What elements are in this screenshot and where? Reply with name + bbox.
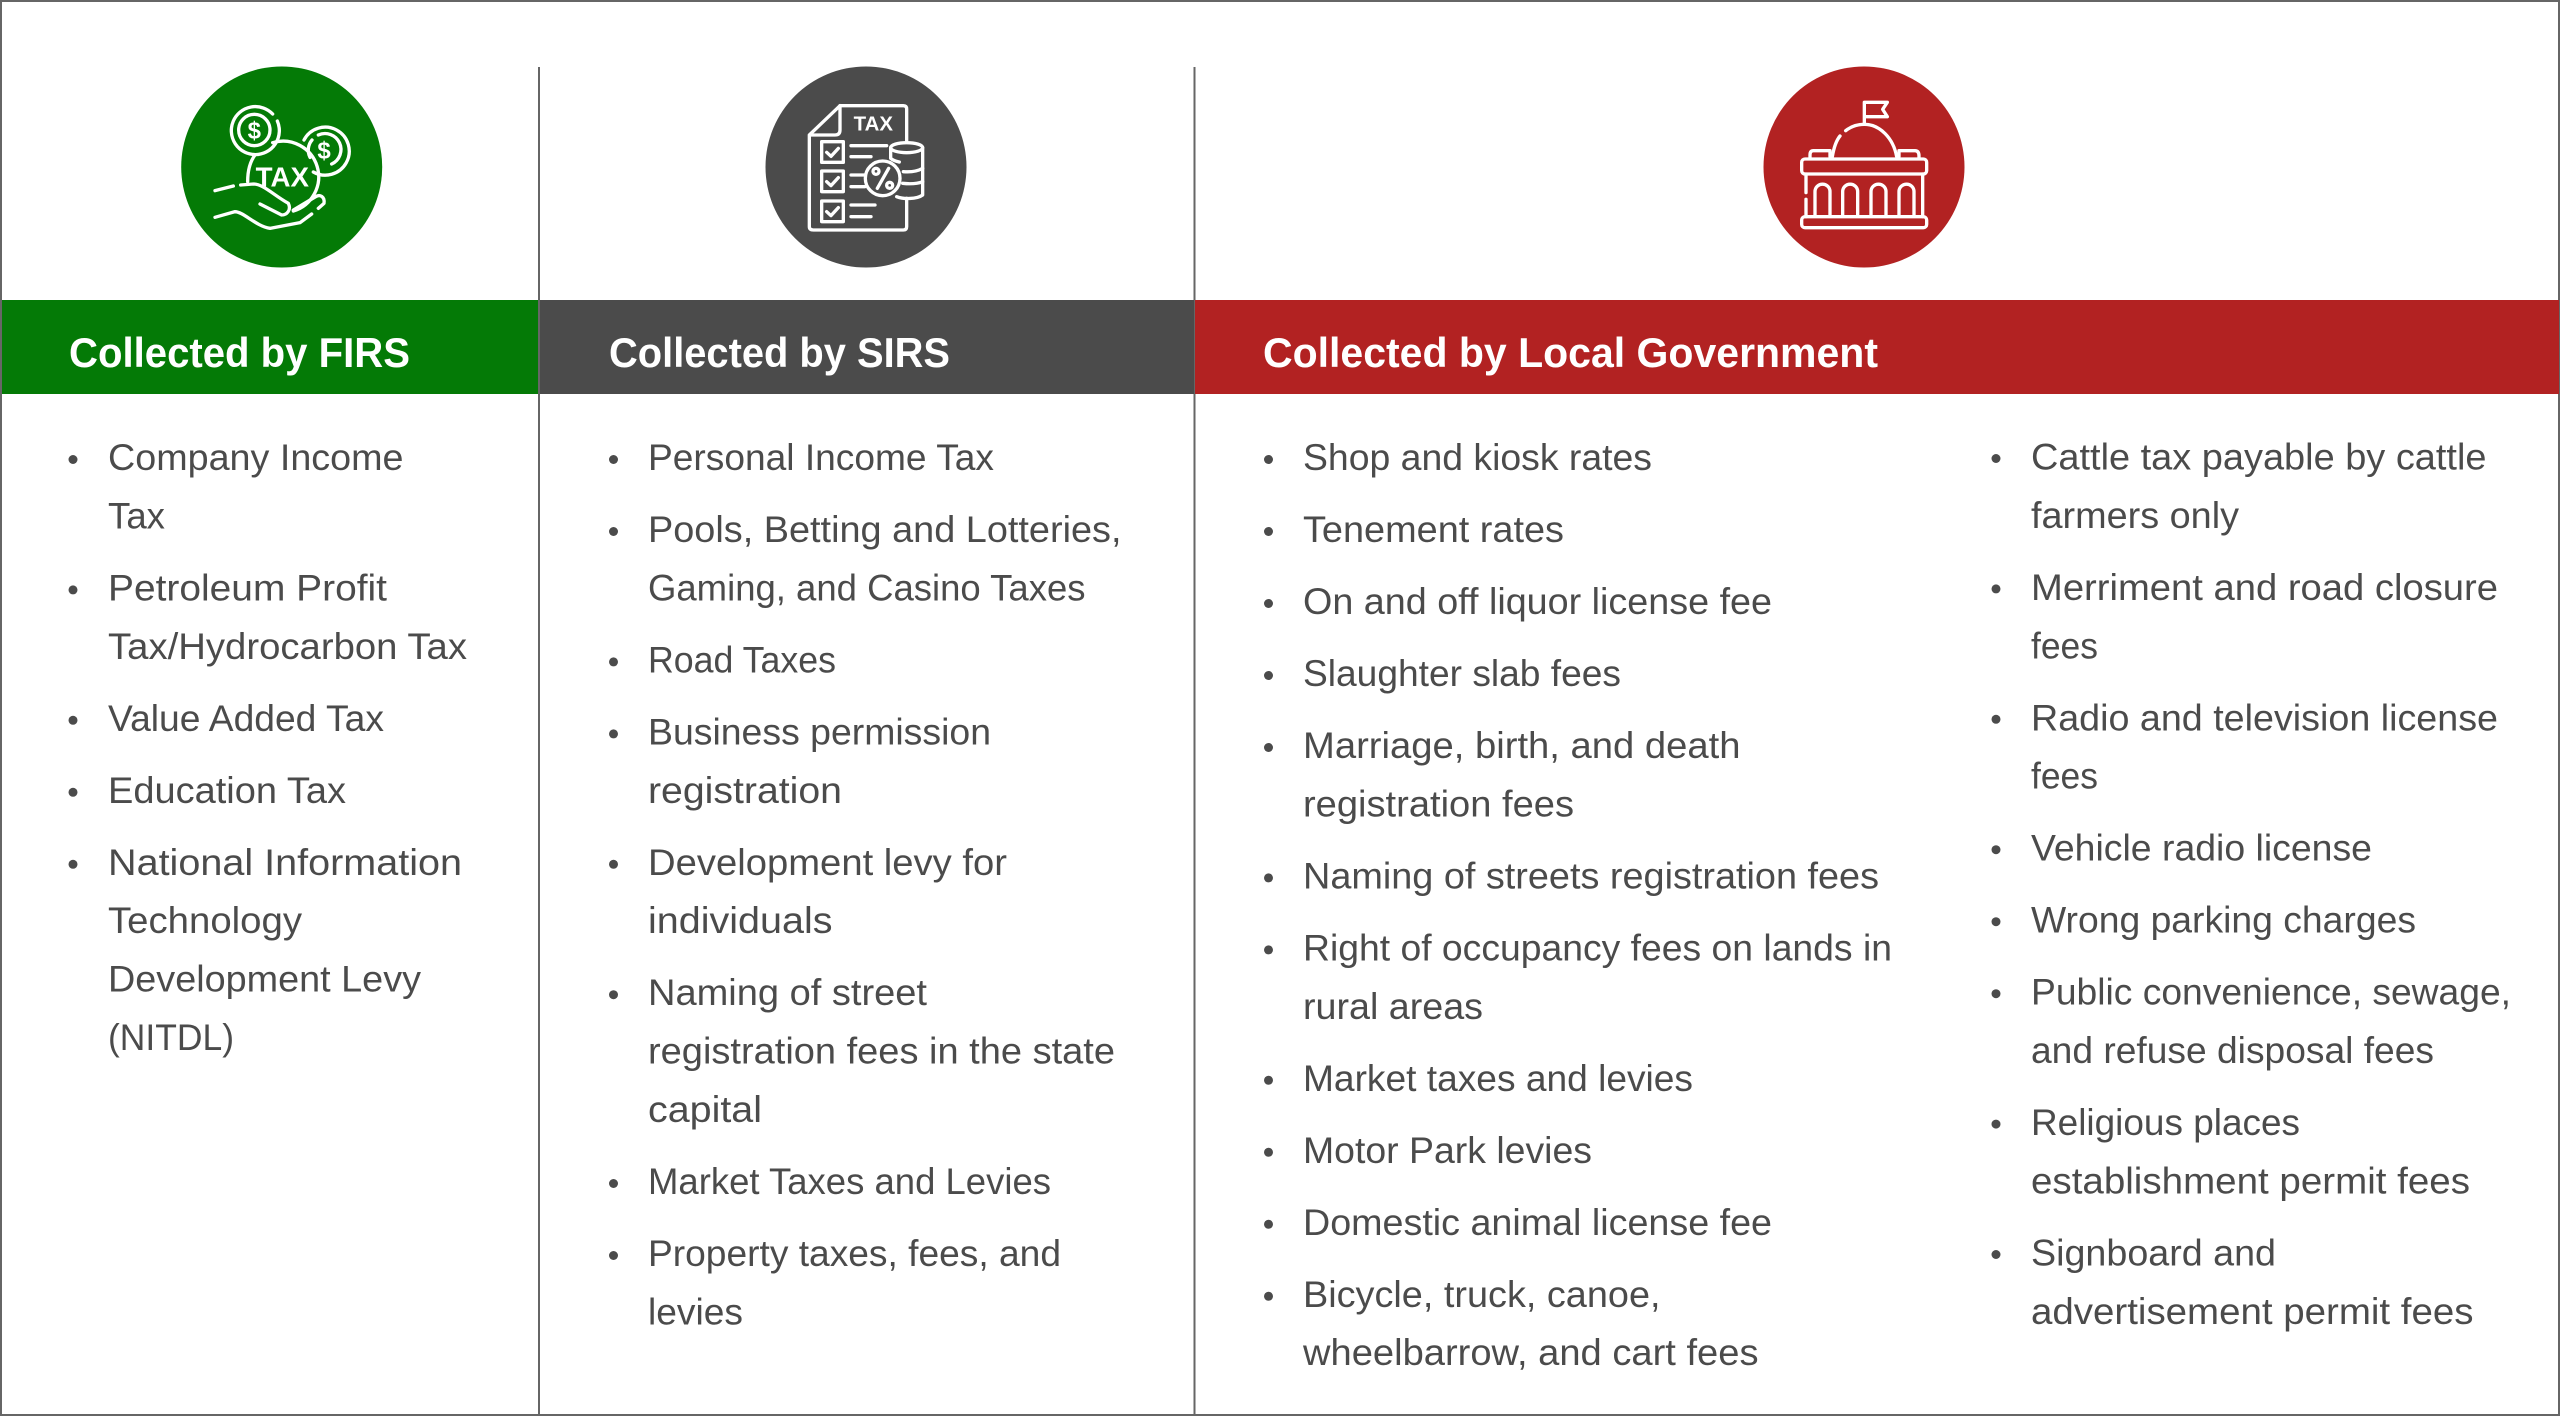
item: Naming of street registration fees: registration fees in the state xyxy=(648,1030,1115,1072)
icon: government building with flag xyxy=(1764,66,1964,268)
list: SIRS taxes xyxy=(609,436,1122,1332)
item: Marriage, birth, and death registration fees: Marriage, birth, and death xyxy=(1303,724,1740,766)
item: Pools, Betting and Lotteries: Pools, Betting and Lotteries, xyxy=(648,508,1122,550)
heading: Collected by FIRS xyxy=(2,300,538,394)
item: Company Income Tax: Company Income xyxy=(108,436,404,478)
item: NITDL: National Information xyxy=(108,841,462,883)
item: Right of occupancy fees: Right of occupancy fees on lands in xyxy=(1303,926,1892,968)
item: Right of occupancy fees xyxy=(1264,926,1892,1027)
item: Naming of street registration fees: capital xyxy=(648,1088,762,1130)
item: Company Income Tax xyxy=(68,436,404,536)
item: Market Taxes and Levies: Market Taxes and Levies xyxy=(648,1160,1051,1202)
item: Value Added Tax: Value Added Tax xyxy=(108,697,384,739)
item: Public convenience, sewage, and refuse disposal fees: Public convenience, sewage, xyxy=(2031,971,2511,1013)
item: Cattle tax xyxy=(1992,436,2486,536)
item: Merriment and road closure fees xyxy=(1992,566,2498,666)
item: Naming of street registration fees: Naming of street xyxy=(648,971,928,1013)
item: Naming of street registration fees xyxy=(609,971,1115,1130)
item: Pools, Betting and Lotteries xyxy=(609,508,1122,608)
item: Development levy for individuals xyxy=(609,841,1007,941)
heading: Collected by Local Government: Collected by Local Government xyxy=(1263,329,1878,376)
item: Signboard and advertisement permit fees: Signboard and xyxy=(2031,1232,2276,1274)
item: Pools, Betting and Lotteries: Gaming, and Casino Taxes xyxy=(648,566,1086,608)
item: Radio and television license fees: Radio and television license xyxy=(2031,696,2498,738)
panel: collected by FIRS xyxy=(2,66,538,1058)
item: Business permission registration: registration xyxy=(648,769,842,811)
icon: hand holding tax and coins: $ xyxy=(248,117,261,144)
item: Bicycle, truck, canoe, wheelbarrow, and cart fees: Bicycle, truck, canoe, xyxy=(1303,1273,1660,1315)
item: Personal Income Tax: Personal Income Tax xyxy=(648,436,994,478)
item: Property taxes, fees, and levies: Property taxes, fees, and xyxy=(648,1232,1061,1274)
item: Religious places establishment permit fees: establishment permit fees xyxy=(2031,1160,2470,1202)
item: Wrong parking charges: Wrong parking charges xyxy=(2031,899,2416,941)
item: NITDL: (NITDL) xyxy=(108,1016,234,1058)
item: Naming of streets registration fees: Naming of streets registration fees xyxy=(1303,854,1879,896)
item: Radio and television license fees: fees xyxy=(2031,755,2098,797)
item: Business permission registration: Business permission xyxy=(648,710,991,752)
item: Slaughter slab fees: Slaughter slab fees xyxy=(1303,652,1621,694)
item: Bicycle, truck, canoe, wheelbarrow, and cart fees xyxy=(1264,1273,1758,1373)
item: Signboard and advertisement permit fees: advertisement permit fees xyxy=(2031,1290,2474,1332)
item: NITDL: Technology xyxy=(108,899,302,941)
heading: Collected by SIRS xyxy=(540,300,1194,394)
item: Development levy for individuals: individuals xyxy=(648,899,832,941)
item: Motor Park levies: Motor Park levies xyxy=(1303,1129,1592,1171)
item: Market taxes and levies: Market taxes and levies xyxy=(1303,1057,1693,1099)
item: Business permission registration xyxy=(609,710,991,811)
item: Marriage, birth, and death registration fees xyxy=(1264,724,1740,824)
list: Local Government taxes, left column xyxy=(1264,436,1892,1373)
item: Property taxes, fees, and levies xyxy=(609,1232,1061,1332)
item: Road Taxes: Road Taxes xyxy=(648,638,836,680)
item: Domestic animal license fee: Domestic animal license fee xyxy=(1303,1201,1772,1243)
item: Marriage, birth, and death registration fees: registration fees xyxy=(1303,782,1574,824)
item: Public convenience, sewage, and refuse disposal fees xyxy=(1992,971,2511,1071)
item: Property taxes, fees, and levies: levies xyxy=(648,1290,743,1332)
item: Radio and television license fees xyxy=(1992,696,2498,797)
icon: hand holding tax and coins: TAX xyxy=(256,162,309,193)
item: Petroleum Profit Tax xyxy=(68,566,467,667)
item: Petroleum Profit Tax: Petroleum Profit xyxy=(108,566,388,608)
item: Religious places establishment permit fees xyxy=(1992,1101,2470,1202)
item: Cattle tax: Cattle tax payable by cattle xyxy=(2031,436,2486,478)
list: FIRS taxes xyxy=(68,436,467,1058)
item: Petroleum Profit Tax: Tax/Hydrocarbon Tax xyxy=(108,625,467,667)
icon: tax document with percent and coins xyxy=(766,66,966,268)
item: Merriment and road closure fees: fees xyxy=(2031,624,2098,666)
item: Shop and kiosk rates: Shop and kiosk rates xyxy=(1303,436,1652,478)
item: NITDL xyxy=(68,841,462,1058)
icon: hand holding tax and coins: $ xyxy=(317,138,331,165)
item: Right of occupancy fees: rural areas xyxy=(1303,985,1483,1027)
heading: Collected by Local Government xyxy=(1195,300,2559,394)
heading: Collected by SIRS: Collected by SIRS xyxy=(609,329,950,376)
list: Local Government taxes, right column xyxy=(1992,436,2511,1332)
item: Bicycle, truck, canoe, wheelbarrow, and cart fees: wheelbarrow, and cart fees xyxy=(1302,1331,1758,1373)
icon: tax document with percent and coins: TAX xyxy=(854,113,894,135)
item: Vehicle radio license: Vehicle radio license xyxy=(2031,827,2372,869)
item: Education Tax: Education Tax xyxy=(108,769,346,811)
panel: collected by Local Government xyxy=(1195,66,2559,1373)
panel: collected by SIRS xyxy=(540,66,1194,1332)
item: NITDL: Development Levy xyxy=(108,958,421,1000)
item: Religious places establishment permit fees: Religious places xyxy=(2031,1101,2300,1143)
item: Development levy for individuals: Development levy for xyxy=(648,841,1007,883)
item: Company Income Tax: Tax xyxy=(108,494,165,536)
item: On and off liquor license fee: On and off liquor license fee xyxy=(1303,580,1772,622)
item: Cattle tax: farmers only xyxy=(2031,494,2239,536)
heading: Collected by FIRS: Collected by FIRS xyxy=(69,329,410,376)
item: Signboard and advertisement permit fees xyxy=(1992,1232,2474,1332)
item: Tenement rates: Tenement rates xyxy=(1303,508,1564,550)
item: Merriment and road closure fees: Merriment and road closure xyxy=(2031,566,2498,608)
item: Public convenience, sewage, and refuse disposal fees: and refuse disposal fees xyxy=(2031,1029,2434,1071)
icon: hand holding tax and coins xyxy=(181,66,382,268)
